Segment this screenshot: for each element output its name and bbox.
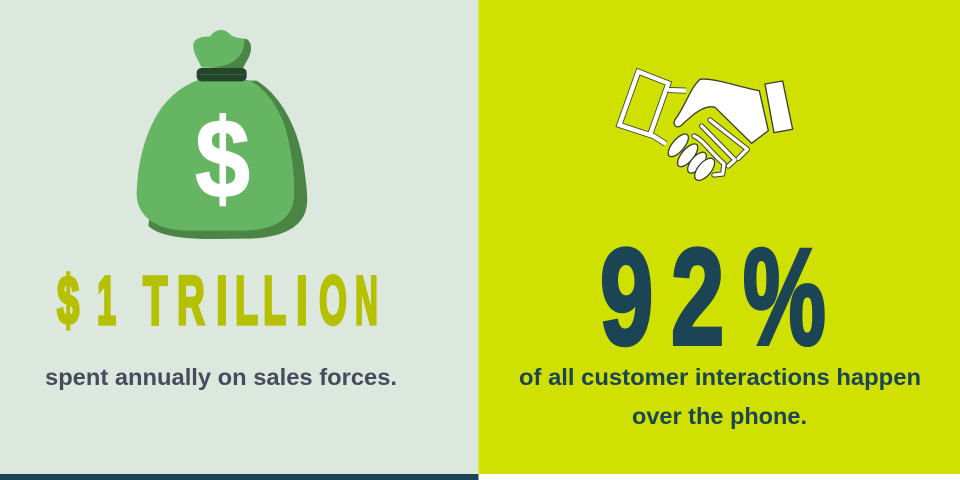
heading: $1 trillion: R <box>177 261 205 339</box>
heading: $1 trillion: 1 <box>97 262 116 339</box>
heading: $1 trillion: I <box>216 263 228 340</box>
heading: $1 trillion: L <box>263 262 286 339</box>
bottom bar <box>0 474 478 480</box>
heading: $1 trillion <box>57 261 378 340</box>
heading: $1 trillion: N <box>355 262 378 339</box>
heading: 92 percent <box>600 220 826 374</box>
text: left caption: spent annually on sales forces. <box>45 364 397 390</box>
heading: 92 percent: % <box>743 220 826 373</box>
heading: $1 trillion: O <box>319 261 347 339</box>
heading: 92 percent: 2 <box>671 221 724 374</box>
text: right caption: over the phone. <box>632 403 807 429</box>
icon: money bag: $ <box>195 97 250 221</box>
heading: $1 trillion: L <box>235 262 258 339</box>
panel: right background <box>478 0 960 474</box>
heading: $1 trillion: T <box>143 262 167 339</box>
text: right caption: of all customer interactions happen <box>519 364 921 390</box>
heading: $1 trillion: I <box>296 263 308 340</box>
heading: 92 percent: 9 <box>600 221 653 374</box>
heading: $1 trillion: $ <box>57 262 79 339</box>
icon: money bag <box>137 30 307 239</box>
text: right caption <box>519 364 921 429</box>
panel: left background <box>0 0 478 474</box>
icon: handshake <box>619 72 793 184</box>
